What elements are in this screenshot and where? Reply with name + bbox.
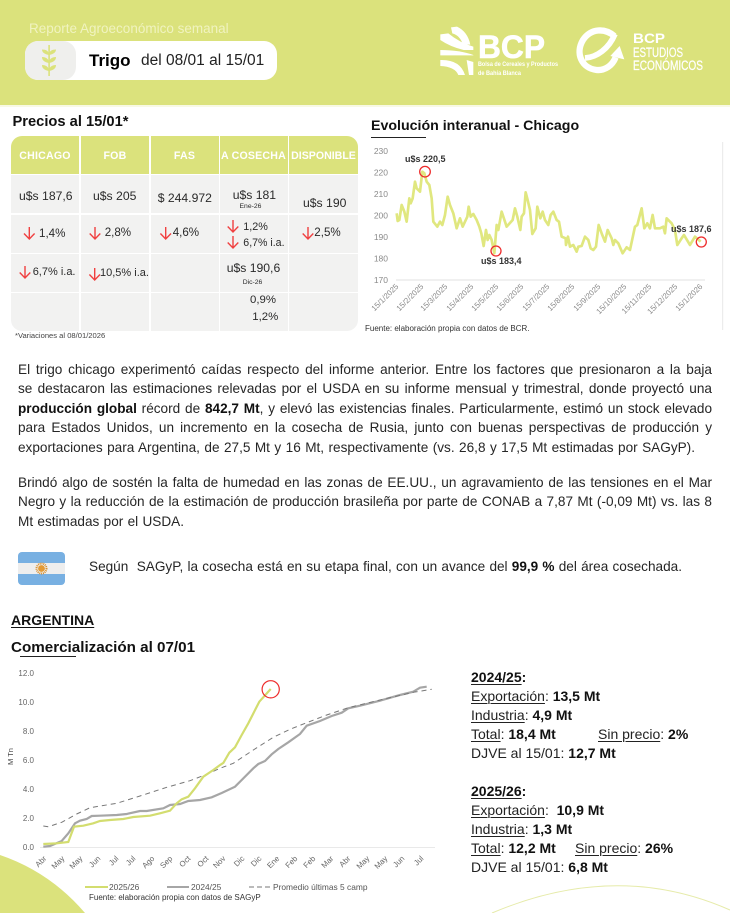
pill icon cell (25, 41, 76, 80)
pill dates: del 08/01 al 15/01 (141, 52, 264, 69)
chart: commercialization: 2.0 (23, 814, 35, 823)
price: FOB: u$s 205 (93, 189, 136, 203)
chart: commercialization: Ene (265, 854, 281, 870)
change: a cosecha: 1,2% (243, 221, 268, 233)
chart: commercialization: 0.0 (23, 843, 35, 852)
text block: first paragraph: exportaciones para Argentina, de 27,5 Mt y 16 Mt, respectivamente (vs. 26,8 y 17,5 Mt estimadas por SAGyP). (18, 440, 695, 455)
change: disponible: 2,5% (314, 226, 341, 239)
chart: Chicago year-on-year: 15/12/2025 (645, 282, 680, 316)
yearly change: a cosecha: 6,7% i.a. (243, 237, 285, 249)
chart: Chicago year-on-year: 190 (374, 232, 388, 242)
table header: DISPONIBLE (289, 136, 358, 174)
table header: FAS (150, 136, 218, 174)
chart: Chicago year-on-year: 15/7/2025 (521, 282, 552, 313)
price: FAS: $ 244.972 (158, 190, 212, 204)
chart: commercialization: Mar (320, 854, 336, 870)
chart source: Chicago: Fuente: elaboración propia con datos de BCR. (365, 324, 530, 333)
chart: Chicago year-on-year: 210 (374, 189, 388, 199)
campaign title 2024/25: 2024/25: (471, 669, 526, 685)
table footnote: *Variaciones al 08/01/2026 (15, 331, 105, 340)
table header: CHICAGO (11, 136, 79, 174)
contract month Dic-26: Dic-26 (243, 279, 262, 286)
pill title: Trigo (89, 51, 131, 70)
chart: Chicago year-on-year: 15/4/2025 (445, 282, 476, 313)
logo: BCP Estudios Económicos: BCP (633, 30, 665, 46)
text block: first paragraph: se destacaron las estimaciones relevadas por el USDA en su informe mensual y trimestral, donde proyectó una (18, 381, 712, 396)
contract month Ene-26: Ene-26 (240, 203, 261, 210)
logo: BCP Bolsa de Cereales: de Bahía Blanca (478, 71, 522, 77)
logo: BCP Bolsa de Cereales: BCP (478, 29, 545, 65)
table header: CHICAGO: CHICAGO (19, 150, 71, 162)
chart: commercialization: Jul (412, 854, 426, 867)
industry 2024/25: Industria: 4,9 Mt (471, 707, 572, 723)
chart: commercialization: Nov (211, 854, 227, 870)
chart: Chicago year-on-year: 15/1/2026 (674, 282, 704, 313)
table header: FAS: FAS (174, 150, 195, 162)
chart: commercialization: Jul (107, 854, 121, 867)
price: disponible: u$s 190 (303, 196, 346, 210)
price: Chicago: u$s 187,6 (19, 189, 73, 203)
text block: first paragraph: El trigo chicago experimentó caídas respecto del informe anterior. Entre los factores que presionaron a la baja (18, 362, 712, 377)
exports 2025/26: Exportación: 10,9 Mt (471, 802, 604, 818)
panel: campaign 2024/25 (471, 669, 688, 761)
header band (0, 0, 730, 105)
chart: Chicago year-on-year: 15/10/2025 (594, 282, 629, 316)
text block: second paragraph (18, 475, 712, 529)
yearly change: FOB: 10,5% i.a. (100, 267, 149, 279)
chart: commercialization: 2025/26 (109, 882, 140, 892)
yearly change: diciembre: 1,2% (252, 311, 278, 323)
total 2024/25: Total: 18,4 Mt (471, 726, 556, 742)
logo: BCP Estudios Económicos: ESTUDIOS (633, 45, 683, 60)
table header: FOB: FOB (104, 150, 126, 162)
unpriced 2025/26: Sin precio: 26% (575, 840, 673, 856)
chart: commercialization: Jun (391, 854, 406, 869)
chart: commercialization: 10.0 (18, 698, 35, 707)
chart: commercialization: Jul (124, 854, 138, 867)
chart: Chicago year-on-year: 220 (374, 168, 388, 178)
chart: commercialization: May (373, 854, 389, 871)
chart: commercialization: Oct (177, 853, 193, 869)
chart: commercialization: Abr (33, 854, 49, 869)
chart: commercialization: Jun (87, 854, 102, 869)
chart: commercialization: Dic (249, 854, 263, 868)
table header: DISPONIBLE: DISPONIBLE (291, 150, 356, 162)
table header: A COSECHA: A COSECHA (221, 150, 286, 162)
chart: Chicago year-on-year: u$s 183,4 (481, 256, 522, 266)
exports 2024/25: Exportación: 13,5 Mt (471, 688, 600, 704)
chart: commercialization: Oct (195, 853, 211, 869)
text block: second paragraph: Mt estimadas por el USDA. (18, 514, 184, 529)
heading underline (371, 137, 426, 138)
chart: commercialization: Feb (284, 854, 300, 870)
yearly change: Chicago: 6,7% i.a. (33, 266, 76, 278)
table header: FOB (81, 136, 149, 174)
chart: commercialization: M Tn (6, 748, 15, 765)
heading: Chicago chart: Evolución interanual - Chicago (371, 118, 579, 134)
chart: commercialization: May (355, 854, 371, 871)
chart: commercialization: May (68, 854, 84, 871)
text block: second paragraph: Brindó algo de sostén la falta de humedad en las zonas de EE.UU., un agravamiento de las tensiones en el Mar (18, 475, 712, 490)
chart: commercialization: 4.0 (23, 785, 35, 794)
text block: first paragraph (18, 362, 712, 455)
unpriced 2024/25: Sin precio: 2% (598, 726, 688, 742)
chart: Chicago year-on-year: 15/5/2025 (470, 282, 501, 313)
change: FOB: 2,8% (105, 226, 131, 238)
price: a cosecha diciembre: u$s 190,6 (227, 261, 280, 275)
heading: prices: Precios al 15/01* (12, 114, 128, 130)
chart: commercialization: 12.0 (18, 669, 35, 678)
chart: Chicago year-on-year: 15/1/2025 (370, 282, 401, 313)
panel: campaign 2025/26 (471, 783, 673, 875)
chart: commercialization: 6.0 (23, 756, 35, 765)
chart: Chicago year-on-year: u$s 187,6 (671, 224, 712, 234)
change: FAS: 4,6% (173, 226, 199, 238)
text block: first paragraph: producción global récord de 842,7 Mt, y elevó las existencias finales. Particularmente, estimó un stock elevado (18, 401, 712, 416)
logo: BCP Estudios Económicos: ECONÓMICOS (633, 58, 703, 73)
chart: Chicago year-on-year: u$s 220,5 (405, 154, 446, 164)
text block: first paragraph: para Estados Unidos, un incremento en la cosecha de Rusia, junto con buenas perspectivas de producción y (18, 420, 712, 435)
chart: Chicago year-on-year: 15/9/2025 (572, 282, 603, 313)
chart: commercialization: Feb (302, 854, 318, 870)
panel: prices table (11, 136, 358, 331)
chart: commercialization: Promedio últimas 5 camp (273, 882, 368, 892)
change: Chicago: 1,4% (39, 227, 65, 240)
chart: commercialization: Abr (337, 854, 353, 869)
DJVE 2024/25: DJVE al 15/01: 12,7 Mt (471, 745, 616, 761)
total 2025/26: Total: 12,2 Mt (471, 840, 556, 856)
chart: Chicago year-on-year: 15/8/2025 (546, 282, 577, 313)
product pill (25, 41, 277, 80)
heading underline (20, 656, 76, 657)
chart: Chicago year-on-year: 15/2/2025 (395, 282, 426, 313)
logo: BCP Bolsa de Cereales: Bolsa de Cereales y Productos (478, 62, 559, 68)
industry 2025/26: Industria: 1,3 Mt (471, 821, 572, 837)
chart: Chicago year-on-year: 15/11/2025 (620, 282, 654, 316)
table header: A COSECHA (220, 136, 288, 174)
chart: commercialization: Sep (158, 854, 175, 870)
text block: second paragraph: Negro y la reducción de la estimación de producción brasileña por parte de CONAB a 7,87 Mt (-0,09 Mt) vs. las 8 (18, 494, 712, 509)
DJVE 2025/26: DJVE al 15/01: 6,8 Mt (471, 859, 608, 875)
chart: commercialization: May (50, 854, 66, 871)
pale band under header (0, 105, 730, 107)
report title: Reporte Agroeconómico semanal (29, 20, 229, 36)
text: harvest progress: Según SAGyP, la cosecha está en su etapa final, con un avance del 99,9 % del área cosechada. (89, 559, 682, 574)
chart: commercialization: Dic (232, 854, 246, 868)
chart: Chicago year-on-year: 180 (374, 254, 388, 264)
heading: commercialization: Comercialización al 07/01 (11, 638, 195, 656)
chart: commercialization: 2024/25 (191, 882, 222, 892)
chart: commercialization: 8.0 (23, 727, 35, 736)
chart source: commercialization: Fuente: elaboración propia con datos de SAGyP (89, 893, 261, 902)
price: a cosecha enero: u$s 181 (233, 188, 276, 202)
chart: Chicago year-on-year: 170 (374, 275, 388, 285)
table values (19, 188, 346, 323)
chart: Chicago year-on-year: 200 (374, 210, 388, 220)
chart: commercialization: Ago (140, 854, 157, 870)
campaign title 2025/26: 2025/26: (471, 783, 526, 799)
heading: Argentina: ARGENTINA (11, 612, 94, 628)
chart: Chicago year-on-year: 15/3/2025 (419, 282, 450, 313)
change: diciembre: 0,9% (250, 294, 276, 306)
chart: Chicago year-on-year: 230 (374, 146, 388, 156)
chart: Chicago year-on-year: 15/6/2025 (495, 282, 526, 313)
